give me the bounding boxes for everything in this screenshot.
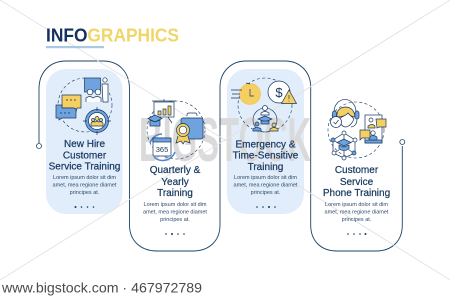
title underline [46, 46, 104, 48]
heading: card 2: Training [157, 188, 193, 199]
heading: card 1: Service Training [49, 162, 120, 172]
text: card 4 body: Lorem ipsum dolor sit dim [325, 202, 388, 208]
title: INFOGRAPHICS [46, 26, 179, 46]
heading: card 4: Customer [335, 165, 378, 176]
icon: quarterly and yearly training [147, 99, 205, 160]
pagination dots: card 1 [74, 206, 94, 208]
text: card 1 body: Lorem ipsum dolor sit dim [53, 175, 116, 181]
icon: new hire training [56, 78, 112, 135]
heading: card 3: Time-Sensitive [233, 150, 299, 162]
pagination dots: card 4 [347, 233, 366, 235]
heading: card 4: Phone Training [323, 188, 390, 199]
panel: card 3 background [227, 69, 304, 214]
text: card 2 body: principes at. [160, 217, 190, 223]
text: card 3 body: amet, mea regione diamet [234, 182, 298, 188]
panel: card 1 background [46, 69, 122, 214]
footer: stock image credit: www.bigstock.com · 467972789 [1, 280, 202, 296]
text: card 1 body: principes at. [70, 190, 100, 196]
heading: card 3: Training [248, 162, 283, 173]
text: card 1 body: amet, mea regione diamet [53, 182, 117, 188]
text: card 4 body: principes at. [342, 217, 372, 223]
heading: card 4: Service [340, 177, 374, 188]
heading: card 2: Yearly [161, 177, 189, 188]
text: card 3 body: principes at. [251, 190, 281, 196]
text: card 4 body: amet, mea regione diamet [325, 210, 389, 216]
heading: card 1: New Hire [64, 139, 105, 150]
heading: card 3: Emergency & [235, 140, 296, 150]
icon: customer service phone training [328, 99, 386, 160]
icon: emergency training: $ [275, 85, 283, 100]
pagination dots: card 3 [256, 206, 276, 208]
icon: emergency training [231, 78, 296, 132]
heading: card 1: Customer [63, 150, 107, 162]
icon: quarterly and yearly training: 365 [156, 145, 168, 154]
pagination dots: card 2 [165, 233, 185, 235]
timeline outline connecting the cards [36, 61, 405, 251]
text: card 2 body: Lorem ipsum dolor sit dim [144, 202, 206, 208]
text: card 2 body: amet, mea regione diamet [143, 210, 207, 216]
text: card 3 body: Lorem ipsum dolor sit dim [234, 175, 297, 181]
heading: card 2: Quarterly & [150, 165, 200, 176]
